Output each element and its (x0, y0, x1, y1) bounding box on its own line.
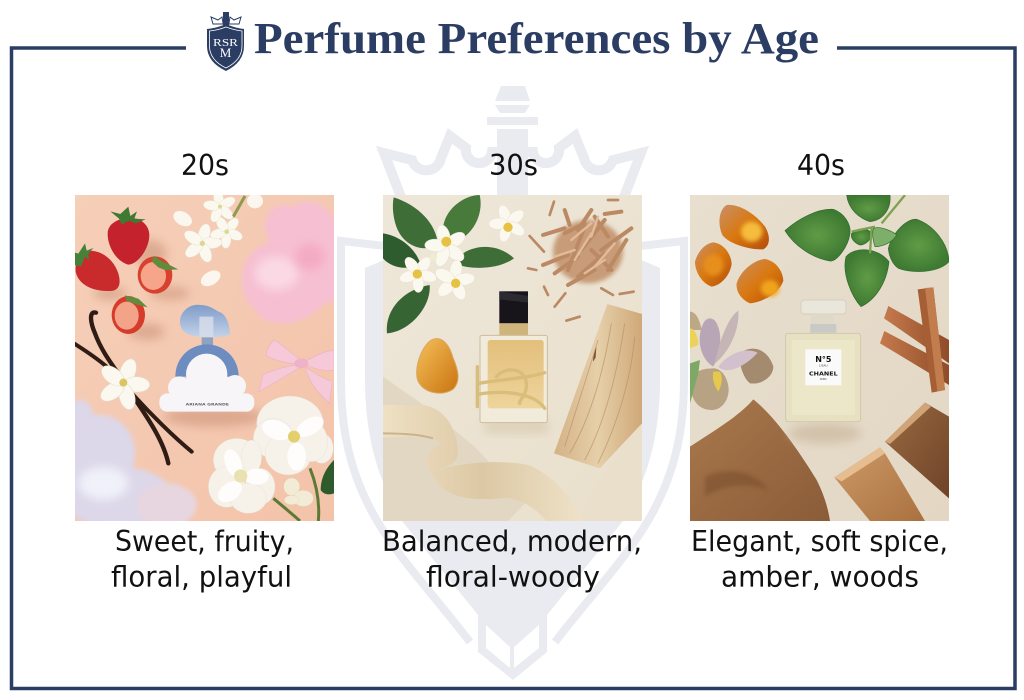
column 1: 20s: floral, playful (111, 560, 292, 594)
bottle: No 5: N°5 (815, 355, 831, 364)
satin ribbon (383, 405, 583, 521)
iris flower (690, 311, 773, 410)
caption: 20s: Sweet, fruity, (115, 525, 294, 558)
sandalwood shavings (528, 200, 634, 321)
shadows (93, 240, 263, 427)
amber stones (695, 205, 783, 303)
amber drop (417, 339, 458, 393)
photo: sweet fruity floral still life: ARIANA GRANDE (186, 402, 230, 406)
column 3: 40s (690, 149, 949, 594)
logo: RSM crest: M (220, 45, 232, 60)
caption: 40s: Elegant, soft spice, (691, 525, 948, 558)
heading: 20s: 20s (181, 149, 229, 182)
column 2: 30s (382, 149, 642, 594)
column 3: 40s: amber, woods (721, 560, 919, 594)
mint leaves (785, 195, 949, 307)
wood blocks (834, 403, 949, 521)
white gardenias (208, 396, 334, 521)
logo: RSM crest: RSR (213, 37, 239, 49)
watermark: shield crest (341, 86, 684, 680)
wood block (554, 304, 642, 468)
suede fabric (690, 399, 830, 521)
photo: balanced floral woody still life (383, 195, 642, 521)
leaves (383, 195, 514, 333)
bottle: No 5: CHANEL (809, 371, 838, 377)
cotton candy pink (242, 202, 343, 323)
pink bow (259, 340, 334, 403)
fabric (383, 377, 526, 521)
column 1: 20s (60, 149, 343, 594)
strawberries (108, 218, 149, 265)
bottle: No 5: PARIS (820, 378, 827, 381)
bottle: No 5 (786, 300, 862, 443)
bottle: blue cloud (180, 305, 230, 337)
cinnamon sticks (880, 287, 949, 393)
heading: 40s: 40s (797, 149, 845, 182)
photo: sweet fruity floral still life (75, 195, 334, 521)
title: Perfume Preferences by Age (254, 14, 819, 63)
orange blossom flowers (391, 198, 533, 305)
column 2: 30s: floral-woody (426, 560, 600, 594)
bottle: gold perfume (477, 291, 548, 433)
vanilla pods (75, 312, 192, 463)
top white flowers (173, 195, 263, 286)
heading: 30s: 30s (489, 149, 538, 182)
caption: 30s: Balanced, modern, (382, 525, 642, 558)
vanilla flower (100, 358, 150, 410)
logo: RSM crest (207, 12, 244, 71)
bottle: No 5: L'EAU (819, 364, 828, 368)
photo: elegant spice amber woods still life (690, 195, 949, 521)
lavender cloud (75, 398, 198, 521)
